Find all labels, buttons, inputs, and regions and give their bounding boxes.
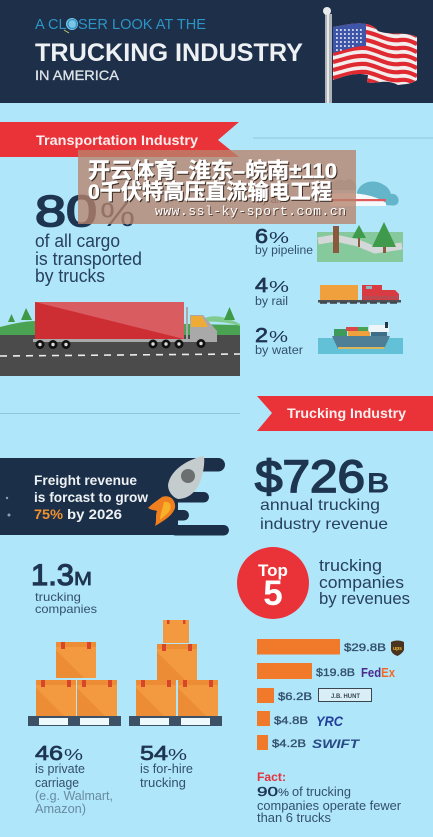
bar: Swift: $4.2B — [272, 738, 306, 750]
stat: 1.3M companies: M — [74, 569, 92, 589]
badge: top 5: 5 — [263, 574, 283, 613]
bar: UPS — [257, 639, 404, 656]
bar: UPS: $29.8B — [344, 642, 386, 654]
stat: annual revenue: B — [367, 468, 389, 498]
text: freight revenue forecast: Freight revenue — [34, 472, 137, 488]
illustration: truck on road — [0, 302, 240, 376]
stat: 80 percent: 80 — [35, 187, 97, 236]
text: top 5 description: companies — [319, 573, 404, 592]
bar: Swift — [257, 735, 361, 751]
stat: 6 percent by pipeline: % — [269, 230, 289, 247]
icon: pipeline scene — [317, 222, 403, 262]
stat: annual revenue: $726 — [255, 451, 365, 502]
stat: 80 percent: of all cargo — [35, 231, 120, 251]
bar: FedEx — [257, 663, 396, 680]
icon: left stack of boxes — [28, 642, 121, 726]
heading: a closer look at the: A CLOSER LOOK AT THE — [35, 16, 206, 33]
callout: fact: companies operate fewer — [257, 799, 401, 813]
panel: freight revenue banner — [0, 456, 229, 536]
stat: 4 percent by rail: 4 — [255, 275, 268, 297]
bar chart: top 5 revenues — [257, 639, 404, 751]
stat: 46 percent private: Amazon) — [35, 802, 86, 816]
stat: 80 percent — [35, 187, 147, 286]
stat: 1.3M companies: companies — [35, 602, 97, 616]
icon: flag on pole — [323, 7, 418, 103]
text: freight revenue forecast: by 2026 — [67, 506, 122, 522]
stat: annual revenue: annual trucking — [260, 497, 380, 514]
stat: 2 percent by water — [255, 325, 303, 357]
stat: 46 percent private: is private — [35, 762, 85, 776]
stat: 54 percent for hire: % — [168, 747, 187, 764]
stat: 6 percent by pipeline — [255, 226, 313, 257]
stat: 46 percent private: carriage — [35, 776, 79, 790]
bar: Swift: SWIFT — [312, 737, 361, 751]
stat: 54 percent for hire — [140, 743, 196, 790]
icon: right stack of boxes — [129, 620, 222, 726]
callout: fact: than 6 trucks — [257, 811, 331, 825]
stat: 1.3M companies — [31, 559, 97, 616]
icon: magnifier on letter O — [64, 18, 78, 33]
ribbon: trucking industry: Trucking Industry — [287, 406, 407, 421]
text: freight revenue forecast: 75% — [34, 506, 64, 522]
badge: top 5: Top — [258, 561, 288, 580]
badge: top 5 — [237, 547, 309, 619]
stat: 4 percent by rail: % — [269, 279, 289, 296]
callout: fact — [257, 772, 404, 825]
bar: YRC — [257, 711, 344, 729]
stat: 46 percent private: 46 — [35, 743, 63, 765]
stat: 6 percent by pipeline: 6 — [255, 226, 268, 248]
stat: 1.3M companies: 1.3 — [31, 559, 74, 592]
stat: 54 percent for hire: trucking — [140, 776, 186, 790]
stat: 54 percent for hire: is for-hire — [140, 762, 193, 776]
callout: fact: of trucking — [292, 785, 351, 799]
bar: UPS: ups — [393, 646, 402, 652]
stat: 80 percent: % — [100, 196, 135, 233]
stat: 2 percent by water: 2 — [255, 325, 268, 347]
stat: 6 percent by pipeline: by pipeline — [255, 245, 313, 257]
icon: plane and clouds — [330, 179, 399, 206]
icon: rocket — [148, 456, 204, 526]
icon: train — [318, 285, 401, 303]
stat: annual revenue: industry revenue — [260, 516, 388, 533]
subtitle: in america: IN AMERICA — [35, 67, 120, 83]
stat: 2 percent by water: by water — [255, 345, 303, 357]
stat: 80 percent: by trucks — [35, 266, 105, 286]
watermark overlay: www.ssl-ky-sport.com.cn — [155, 204, 346, 219]
title: trucking industry: TRUCKING INDUSTRY — [35, 39, 303, 67]
bar: YRC: $4.8B — [274, 715, 308, 727]
bar: J.B. Hunt: J.B. HUNT — [331, 693, 360, 700]
bar: J.B. Hunt: $6.2B — [278, 691, 312, 703]
stat: 46 percent private: (e.g. Walmart, — [35, 789, 113, 803]
watermark overlay: 0千伏特高压直流输电工程 — [88, 179, 332, 204]
stat: 4 percent by rail — [255, 275, 289, 308]
panel: header — [0, 0, 433, 103]
bar: FedEx: $19.8B — [316, 667, 355, 679]
text: freight revenue forecast: is forcast to grow — [34, 489, 148, 505]
label: by air: by air — [256, 194, 283, 206]
ribbon: transportation industry: Transportation Industry — [36, 132, 198, 148]
icon: cargo ship — [318, 322, 403, 354]
bar: YRC: YRC — [316, 713, 344, 729]
ribbon: trucking industry — [257, 396, 433, 431]
stat: 1.3M companies: trucking — [35, 590, 81, 604]
stat: 2 percent by water: % — [269, 329, 288, 346]
stat: 46 percent private: % — [64, 747, 83, 764]
callout: fact: % — [278, 787, 289, 799]
callout: fact: 90 — [257, 784, 278, 799]
bar: FedEx: FedEx — [361, 665, 396, 680]
text: top 5 description: trucking — [319, 556, 382, 575]
callout: fact: Fact: — [257, 772, 286, 784]
stat: 46 percent private — [35, 743, 116, 816]
watermark overlay — [78, 150, 356, 224]
stat: 4 percent by rail: by rail — [255, 296, 288, 308]
text: top 5 description: by revenues — [319, 589, 410, 608]
watermark overlay: 开云体育–淮东–皖南±110 — [88, 158, 337, 183]
stat: annual revenue — [255, 451, 389, 533]
ribbon: transportation industry — [0, 122, 239, 157]
bar: J.B. Hunt — [257, 688, 372, 703]
stat: 80 percent: is transported — [35, 249, 142, 269]
stat: 54 percent for hire: 54 — [140, 743, 168, 765]
